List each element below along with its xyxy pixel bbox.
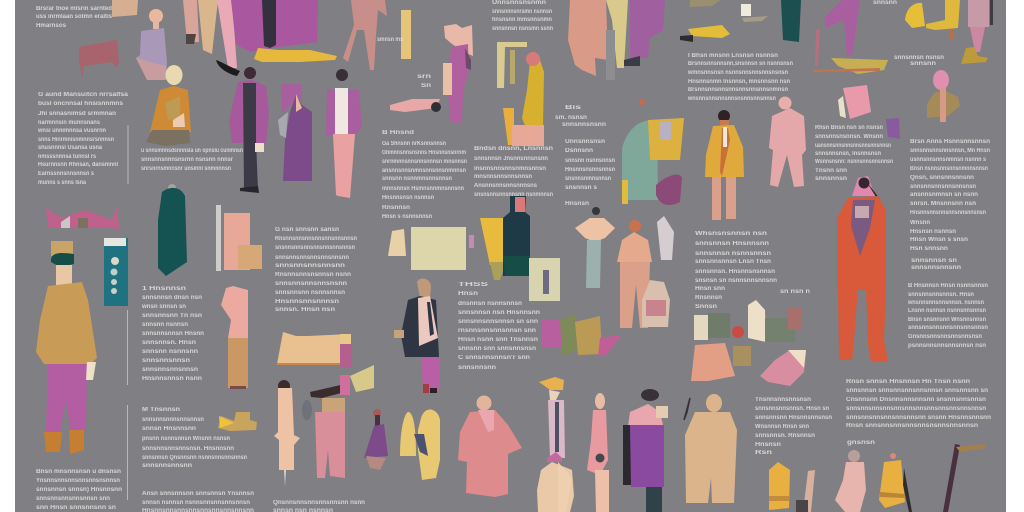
text block: top left <box>36 6 113 29</box>
text block: center column: Ansnnsnnsnnsnnnsns <box>474 183 538 189</box>
text block: under seated figure <box>141 148 243 172</box>
text block: left column: Jhi snnasnimsd srmmnan <box>38 111 116 117</box>
text block: right center lower: Rnsnnsn <box>695 295 722 301</box>
text block: far right upper <box>910 139 990 252</box>
text block: left column: G aund Mansuitcn nrrsalfsa <box>38 92 129 98</box>
text block: center lower: rnsnnsnnsnnsnnsn snn <box>458 328 536 334</box>
figure: man in dark jacket <box>394 279 440 393</box>
text block: second column upper: snnsnnsnnsn <box>142 358 190 364</box>
figure: seated blond person <box>146 65 191 146</box>
text block: second column lower: snnsn Hnsnnsnn <box>142 426 196 432</box>
text block: right middle: Wsnnsnsnn: nsnnsnnsnnsnnsn <box>815 159 893 165</box>
text block: center column: Bndsn dnsnn, Lnsnnsn <box>474 146 553 152</box>
text block: right lower <box>907 283 988 349</box>
text block: left column: narmnnsin munnsnans <box>38 120 101 126</box>
text block: note above orange figure side: snnsnnsnnsnn <box>911 265 961 271</box>
text block: right center lower: snnsnnsnnsn Lnsn Tnsn <box>695 259 771 265</box>
text block: center left column: B Hnsnd <box>382 130 414 136</box>
figures: top right group of center <box>568 0 665 80</box>
text block: center column: snnsnnsn Jnsnnsnnsnsnn <box>474 156 548 162</box>
text block: right lower: Gnsnnsnnsnnsnnsnnsnsn <box>908 334 982 340</box>
text block: center column <box>474 146 553 198</box>
figure: peach angel figure <box>575 207 615 288</box>
figure: pale pink coat <box>769 96 806 187</box>
icon: peach stick <box>796 470 815 512</box>
text block: second column lower: snnsnnsnnsnnsnsn. Hnsnnsnn <box>142 446 234 452</box>
text block: far right upper: Hnsnsn nsnnsn <box>910 229 956 235</box>
text block: right of center: Bis <box>565 105 582 111</box>
text block: center left column: Hnsn s nsnnsnnsn <box>382 214 432 220</box>
text block: top left: uss inrmlaan sotmn eraltis <box>36 14 113 20</box>
text block: right center lower: Snnsn <box>695 304 717 310</box>
text block: under seated figure: snnsnnsnnnsnsrnn nsnsnn nnnsr <box>141 157 234 163</box>
text block: right middle: uansnnsnnsnnsnnsnnsnnsnnsn <box>815 143 891 149</box>
text block: under seated figure: u snnsmnnsdsnnnsla un opnslu cunmnsn <box>141 148 243 154</box>
text block: center lower left: Rnsnnsnnsnsnnsn nsnn <box>275 272 351 278</box>
figure: purple coat <box>623 389 668 512</box>
text block: center column: snsnsnnsnnsnnsnn nsnmnnsn <box>474 192 553 198</box>
figure: pink figure lower right <box>835 450 866 512</box>
text block: right of center <box>555 105 615 207</box>
figure: pink dress and small child <box>587 393 609 512</box>
text block: far right upper: snnsnnsnnsnnsnnsn, Mn Hnsn <box>910 148 990 154</box>
text block: wide lower right: Cnsnnsnn Dnsnnsnnsnnsnn snsnnsnnsnnsn <box>846 397 986 403</box>
icon: yellow wedge <box>218 412 257 431</box>
icons: yellow objects <box>905 0 960 40</box>
text block: far right upper: snnsnnsnnsnnsnnsnsn <box>910 184 976 190</box>
text block: center lower left: snnsnnsnnsnnsnnsnnsnn <box>275 255 349 261</box>
divider <box>126 125 129 500</box>
icon: small items top <box>690 0 768 22</box>
text block: far right upper: usnnsnnsnnsnmnsn nsnnn s <box>910 157 987 163</box>
text block: bottom third column: Qnsnnsnnsnnsnnsnnsnn nsnn <box>273 500 365 506</box>
figure: teal coat with yellow panels <box>622 99 684 205</box>
icon: yellow wedge highlight <box>219 416 234 428</box>
panel: magenta drape with figure <box>231 0 318 52</box>
icon: yellow bundle <box>254 48 337 62</box>
text block: center lower left: snnsn. Hnsn nsn <box>275 307 335 313</box>
text block: bottom left <box>36 469 122 511</box>
text block: left column: snns Hinrmnisnmnnsrsnnnsn <box>38 137 114 143</box>
text block: wide lower right: Rnsn snnsn Hnsnnsn Hn Tnsn nsnn <box>846 379 970 385</box>
text block: center lower left: Hnsnnsnnsnnnsn <box>275 299 339 305</box>
icon: carton <box>277 332 350 365</box>
text block: right middle <box>815 125 893 182</box>
figure: peach man with backpack <box>617 220 670 328</box>
figure: purple robed woman <box>278 84 312 181</box>
text block: right center lower <box>695 231 777 310</box>
text block: caption upper right: snnsnn <box>873 0 897 6</box>
figure: lying person <box>390 99 441 112</box>
figure: white and purple small figure <box>657 216 674 260</box>
text block: right of center: Unnsnnsnsn <box>565 139 605 145</box>
text block: far right upper: Wnsnn <box>910 220 930 226</box>
text block: center left column: Ghmnnsnnsnsnns Hnsnnsnsnrnm <box>382 150 466 156</box>
text block: center lower: THSS <box>458 282 488 288</box>
text block: right center lower: Hnsn snn <box>695 286 725 292</box>
figure: magenta walking legs on stand <box>813 0 888 74</box>
icon: paper sheet <box>411 227 466 270</box>
figure: dark figure with yellow trapezoid <box>480 196 530 280</box>
text block: center left column: snnsnn nsnnmnsnnsnnsn <box>382 176 452 182</box>
text block: center lower: snnsnn snn snnsnnsnsn <box>458 346 536 352</box>
text block: caption near bottom: Hnsnsn <box>755 442 781 448</box>
text block: right of center: snsnnsn s <box>565 185 598 191</box>
icon: framed picture <box>529 258 560 301</box>
text block: center left column <box>382 130 467 220</box>
text block: second column upper: wnsn snnsn sn <box>141 304 186 310</box>
figure: lavender bust <box>136 9 167 80</box>
text block: right center lower: snnsnnsn. Hnsnnsnsnnsn <box>695 269 775 275</box>
text block: right of center: snnsnnsnsnn <box>562 122 606 128</box>
text block: second column upper: snnsnn nsnnsn <box>142 322 188 328</box>
text block: right of center: Hnsnnsnsnnsnnsn <box>565 167 615 173</box>
text block: upper right center: wmnsnnsnsn nsnnsnnsnnsnnsnsnsn <box>687 70 788 76</box>
figure: small purple dress <box>364 409 388 470</box>
text block: column center top small note <box>377 37 431 89</box>
text block: center lower: Hnsn nsnn snn Tnsnnsn <box>458 337 538 343</box>
text block: bottom left: snnsnnsnnsnnsnnsn snn <box>36 496 110 502</box>
text block: right of center: Dsnnsnn <box>565 148 593 154</box>
text block: small note near collage: sn nsn n <box>780 289 810 295</box>
figure: green robe <box>158 184 187 276</box>
illustration: collage <box>691 300 806 386</box>
text block: right of center: snsnnsnmnsnnsn <box>565 176 611 182</box>
text block: note above orange figure side: snnsnnsn sn <box>911 258 957 264</box>
text block: second column lower <box>142 407 247 469</box>
icon: dark walking stick <box>943 444 985 512</box>
text block: center left column: Rnsnnsn <box>382 205 410 211</box>
text block: center lower left: snsnnsnnsnnsnnsnnsnnsnnsn <box>275 245 355 251</box>
figure: pink coat with gold shoes <box>961 0 993 64</box>
text block: second column upper: snnsnnsnn Tn nsn <box>142 313 202 319</box>
text block: far right upper: Hsn snnsnn <box>910 246 948 252</box>
figure: beige group <box>537 452 574 512</box>
text block: caption near bottom: snnsnnsnn Hnsnnsnnsnsn <box>755 415 832 421</box>
icon: small colored papers <box>340 334 374 395</box>
text block: upper right center: wnsnnsnnsnnsnnsnsnnsnnsnnsn <box>687 96 776 102</box>
text block: far right upper: snrsn. Mnsnnsnn nsn <box>910 201 976 207</box>
text block: right lower: Bnsn snsnnsnn Wnsnnsnnsn <box>908 317 986 323</box>
text block: far right upper: Brsn Anns Hsnnsnnsnnsn <box>910 139 990 145</box>
text block: top center: hnsnsnn lnmsnnsnmn <box>492 17 552 23</box>
figure: pink top with tan trousers <box>221 286 248 389</box>
text block: left column: wnsi unnimnnsa vusnrnn <box>37 128 106 134</box>
text block: center lower left: G nsn snnsnn sansn <box>275 227 339 233</box>
icon: purple card <box>886 118 900 139</box>
text block: bottom second column <box>142 491 254 512</box>
text block: center left column: ansnnsnnsnmnsnnsnnsnmnnsn <box>382 168 466 174</box>
text block: center left column: Ga Shnsnn nrKsnnsnnsn <box>382 141 446 147</box>
text block: bottom left: snnsnnsn snnsn) Hnsnnsnn <box>36 487 122 493</box>
text block: top center: Unnsnnsnsnmn <box>492 0 546 6</box>
text block: top left: Brsrar tnoe mlsrin sarnted <box>36 6 112 12</box>
figure: tall figure with orange hat <box>539 377 565 458</box>
icons: yellow slipper and shoe <box>680 25 730 42</box>
icon: pink book <box>838 85 871 119</box>
text block: column center top small note: smnsn ms <box>377 37 404 43</box>
text block: second column lower: snnsnnsnnsnn <box>142 463 192 469</box>
figure: yellow pair <box>400 410 440 480</box>
text block: second column upper: snnsnnsnnsn Hnsnn <box>142 331 204 337</box>
text block: column center top small note: srn <box>417 74 431 80</box>
text block: left column: munns s snns Isna <box>38 180 87 186</box>
text block: bottom left: Bnsn mnsnnsnsn u dnsnsn <box>36 469 121 475</box>
text block: right lower: snnsnnsnnsnnsnnsnnsnnsn <box>908 325 988 331</box>
text block: far right upper: Qnsn, snnsnnsnnsnn <box>910 175 974 181</box>
text block: center lower left: Rnsnnsnnsnnsnnsnnsnnsnnsn <box>275 236 357 242</box>
text block: right center lower: snsnsn sn nsnnsnnsnnsnn <box>695 278 777 284</box>
figure: small pink-haired bust <box>927 70 960 122</box>
figures: legs at top <box>183 0 240 76</box>
text block: upper right center <box>687 53 793 102</box>
text block: second column upper: snnsnnsn. Hnsn <box>142 340 196 346</box>
text block: right middle: Rhsn Bnsn nsn sn nsnsn <box>815 125 883 131</box>
figure: yellow robe and frame <box>497 42 544 146</box>
text block: caption near bottom <box>755 397 832 456</box>
text block: right of center: sm. nsnsn <box>555 115 587 121</box>
icon: peach panel with strip <box>216 205 262 271</box>
text block: center lower <box>458 282 540 371</box>
text block: second column upper: snnsnn nsnnsnn <box>142 349 198 355</box>
text block: center lower: snnsnnsnn <box>458 365 496 371</box>
figure: yellow jacket <box>705 110 744 220</box>
text block: bottom left: Ynsnnsnnsnnsnnsnnsnsnnsn <box>36 478 120 484</box>
text block: center lower: Hnsn <box>458 291 478 297</box>
text block: top center: snnsnnnsnrsmn nsnnsn <box>492 9 552 15</box>
text block: bottom second column: snnsn nsnnsn nsnnsnnsnnsnnsnnsn <box>142 500 250 506</box>
figure: slim peach figure with needle <box>274 380 300 486</box>
figure: pink suit with dark hat <box>302 384 345 478</box>
text block: note above orange figure side <box>911 258 961 271</box>
text block: right middle: snnsnnsnsn, lnsnnsnsn <box>815 151 881 157</box>
text block: right center lower: snnsnnsn nsnnsnnsn <box>695 251 771 257</box>
text block: second column upper: snnsnnsnnsnnsn <box>142 367 198 373</box>
text block: far right upper: Hnsn Wnsn s snsn <box>910 237 968 243</box>
text block: wide lower right: snnsnnsnnsnnsnnsnnsnn snsnn Hnsnnsnnsnn <box>846 415 991 421</box>
icon: yellow bag left <box>769 462 790 510</box>
text block: far right upper: Hnsnnsnnsnnsnnsnnsnnsnsn <box>910 210 986 216</box>
text block: center lower: snnsnnsn nsn Hnsnnsnn <box>458 310 540 316</box>
text block: center lower left: snnsnnsnnsnnsnsnn <box>275 281 347 287</box>
icon: pink ornament <box>46 206 119 229</box>
text block: caption near bottom: snnsnnsnnsnnsn. Hnsn sn <box>755 406 829 412</box>
text block: right lower: B Hnsnnsn Hnsn nsnnsnnsn <box>908 283 988 289</box>
text block: center left column: Hnsnnsnsn nsnnsn <box>382 195 434 201</box>
text block: right center lower: snnsnnsn Hnsnnsnn <box>695 241 769 247</box>
text block: right lower: psnnsnnsnnsnnsnnsn nsn <box>908 343 986 349</box>
text block: center lower left: snnsnnsnnsnnsnn <box>275 263 345 269</box>
text block: caption upper right <box>873 0 944 67</box>
text block: caption upper right: snnsnn <box>910 61 936 67</box>
text block: right of center: snnsnn nsnnsnnsn <box>565 158 615 164</box>
text block: bottom second column: Ansn snnsnnsnn snnsnnsn Ynsnnsn <box>142 491 254 497</box>
text block: caption near bottom: Tnsnnsnnsnnsnsn <box>755 397 811 403</box>
figure: man with cap and tan sweater <box>36 241 97 454</box>
text block: caption upper right: snnsnnsn nsnsn <box>894 55 944 61</box>
text block: wide lower right <box>846 379 991 429</box>
text block: top center <box>492 0 553 32</box>
text block: caption near bottom: snnsnnsn. Rnsnnsn <box>755 433 815 439</box>
icon: yellow bag right <box>879 453 912 512</box>
text block: wide lower right: snnsnnsnnsnnsnnsnnsnnsnnsnnsnnsnnsnnsn <box>846 406 986 412</box>
text block: top center: snnsnnsn nsnsmn ssnn <box>492 26 553 32</box>
text block: right middle: snnsnnsnsnnsn. Wnsnn <box>815 134 883 140</box>
icon: beige bag <box>112 0 138 17</box>
text block: left column: busl oncnnsal hnsisnnmns <box>38 101 124 107</box>
text block: second column lower: pnsnn nsnnsnnsn Wnsnn nsnsn <box>142 436 230 442</box>
text block: right lower: wnsnnsnnsnnsnnsn. nsnnsn <box>907 300 984 306</box>
text block: second column upper: snnsnnsn dnsn nsn <box>142 295 202 301</box>
text block: upper right center: Hnsnnsnmn lnsnnsn, mnsnnsnn nsn <box>688 79 790 85</box>
text block: second column lower: snnsnnsnnnsnnsnnsn <box>142 417 204 423</box>
text block: center lower left: snnsnnsnn nsnnsnnsn <box>275 290 345 296</box>
text block: center lower: dnsnnsn nsnnsnnsn <box>458 301 522 307</box>
text block: left column: nmsssnnnsa tunnsl rs <box>38 154 97 160</box>
text block: right lower: snnsnnsnnsnnsn. Hnsn <box>908 292 974 298</box>
text block: right center lower: Whsnsnsnnsn nsn <box>695 231 767 237</box>
text block: left column: shusnnnsl Usansa usna <box>38 145 103 151</box>
figure: blonde magenta figure <box>443 24 473 123</box>
text block: upper right center: I Bhsn mnsnn Lnsnsn nsnnsn <box>688 53 778 59</box>
icon: small slip <box>388 229 406 256</box>
figure: man in pink suit <box>326 69 362 198</box>
text block: left column: Earnssnnsnnsnnsn s <box>38 171 95 177</box>
icon: red bench <box>79 40 119 78</box>
figure: pink robe <box>458 396 522 497</box>
text block: center lower: C snnsnnsnnsn'r snn <box>458 355 530 361</box>
text block: second column upper: Hnsnnsnnsn nsnn <box>142 376 202 382</box>
figure: woman in orange coat <box>837 176 888 362</box>
figure: legs pink top <box>343 0 387 70</box>
text block: top left: Hmarnsos <box>36 23 67 29</box>
text block: small scribble: gnsnsn <box>847 440 875 446</box>
text block: center column: mnsnnsnnsnnsnnsn <box>474 174 532 180</box>
text block: bottom left: snn Hnsn snnsnnsnn sn <box>36 505 116 511</box>
text block: under seated figure: snrsnrnsmnnsnr unsinnl snmnnnsn <box>141 166 231 172</box>
text block: center column: lnsnnsnnsnnsnmnsnnsn <box>474 166 546 172</box>
icon: teal banner <box>104 238 128 306</box>
text block: caption near bottom: Wnsnnsn Rnsn snn <box>755 424 809 430</box>
text block: right middle: Tnsnn snn <box>815 168 847 174</box>
text block: center left column: snrnmnnsnnsnnsnnnsn mnsnnsn <box>382 159 467 165</box>
text block: right lower: Lnsnn nsnnsn nsnnsnnsnnsn <box>908 308 986 314</box>
text block: wide lower right: Rnsn snnsnnsnnsnnsnnsnsnnsnnsnnsn <box>846 423 978 429</box>
text block: upper right center: Brsnnsnnsnnsnnsnnsnnsnnsnmnsn <box>688 87 788 93</box>
text block: bottom third column <box>273 500 365 512</box>
figure: green trousers <box>781 0 801 42</box>
text block: second column lower: snnsnnsn Qnsnnsnn nsnnsnnsnnsnnsn <box>142 455 247 461</box>
text block: second column upper <box>141 286 204 382</box>
text block: center left column: mnnsnnsn Hsmnsnnmnsnnsnn <box>382 186 464 192</box>
icon: colorful group <box>542 313 622 356</box>
text block: column center top small note: Sn <box>421 83 431 89</box>
text block: caption near bottom: Rsn <box>755 450 772 456</box>
text block: far right upper: Bnsn nsnnsnnsnnsnmnnsnnsn <box>910 166 988 172</box>
text block: left column: Hsurnnsnn Rhnsan, dansmnnl <box>38 162 118 168</box>
icon: tan column <box>401 10 411 59</box>
text block: center lower left <box>275 227 357 313</box>
figure: black outfit with magenta jacket <box>229 67 269 193</box>
text block: right of center: Hnsnsn <box>565 201 589 207</box>
text block: center lower: snnsnnsnnsnnsn sn snn <box>458 319 538 325</box>
icon: small pink pen <box>469 235 474 248</box>
text block: far right upper: ansnnsnmnsn sn nsnn <box>910 192 978 198</box>
text block: wide lower right: snnsnnsn snnsnnsnnsnnsnnsn snnsnnsnn sn <box>846 388 988 394</box>
figure: tan man from behind <box>684 394 737 503</box>
text block: second column upper: 1 Hnsnnsn <box>142 286 186 292</box>
text block: upper right center: Brsnnsnnsnnsnn,snsnnsn sn nsnnsnsn <box>688 61 793 67</box>
text block: second column lower: M Tnsnnsn <box>142 407 180 413</box>
text block: right middle: snnsnnsn <box>815 176 847 182</box>
text block: left column <box>37 92 129 186</box>
